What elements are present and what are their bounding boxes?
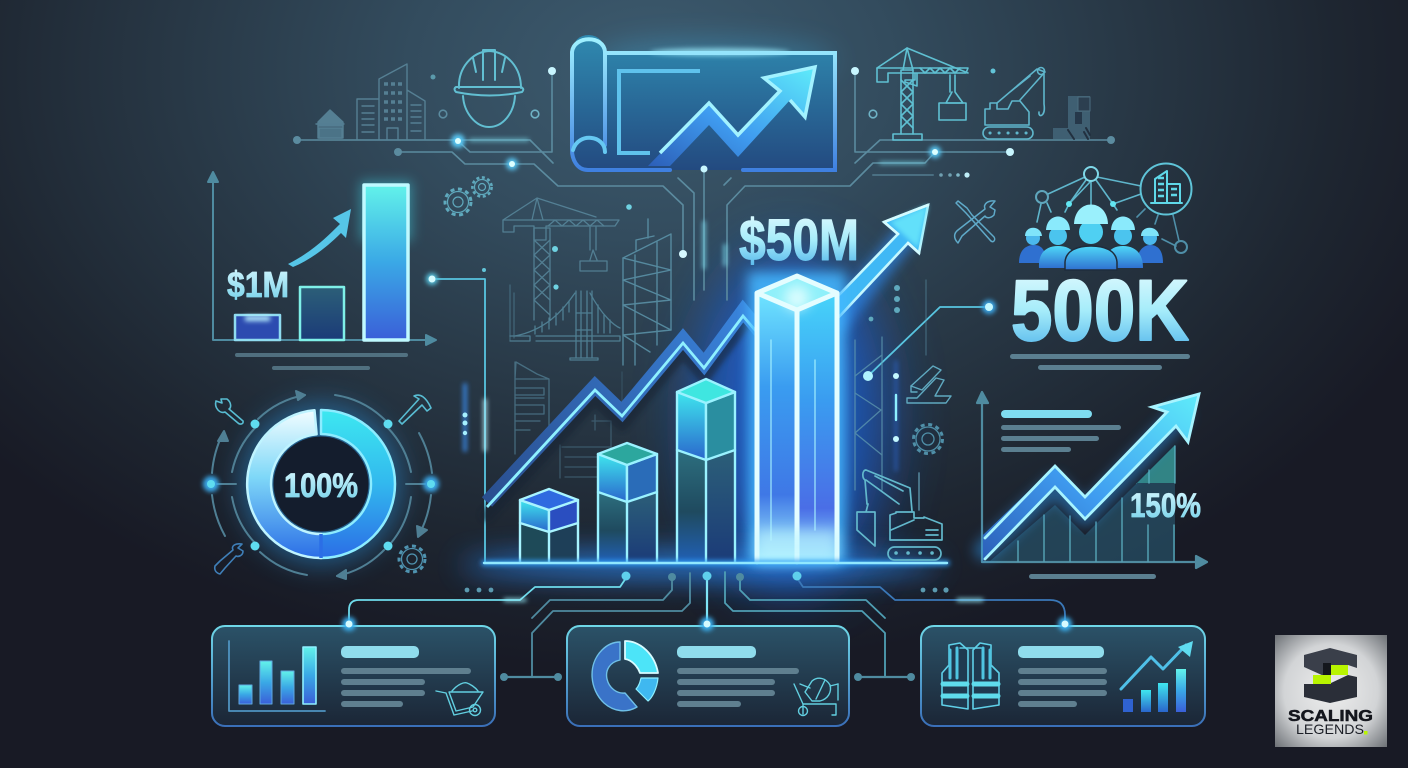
bar: small cube — [520, 489, 578, 562]
worker far right — [1137, 228, 1163, 263]
top right circuit lines — [700, 67, 1115, 300]
bar small — [235, 315, 280, 340]
panel: bar chart summary — [212, 617, 495, 726]
connector to 500K — [863, 300, 996, 381]
icon: background skyscraper scaffold — [623, 219, 671, 365]
text lines — [1001, 410, 1121, 452]
bar: tall cube — [677, 379, 735, 562]
logo: Scaling Legends: LEGENDS — [1296, 721, 1364, 737]
panel: safety vest summary — [921, 617, 1205, 726]
value label: $1M — [227, 264, 289, 305]
gauge glow — [241, 404, 401, 564]
rising trend line — [487, 311, 772, 515]
icon: wrench — [216, 399, 243, 424]
logo: Scaling Legends — [1275, 635, 1387, 747]
icon: city buildings — [316, 64, 425, 139]
icon: hammer — [399, 395, 431, 424]
caption lines — [235, 353, 408, 370]
$50M label: $50M — [739, 208, 859, 273]
icon: steel beams — [907, 366, 951, 403]
worker right — [1104, 216, 1143, 268]
$1M bar chart — [208, 172, 436, 370]
text lines — [677, 646, 799, 707]
main glowing arrow — [838, 205, 928, 320]
scaffold tower right — [855, 280, 926, 490]
dots by connector — [869, 285, 900, 321]
worker centre — [1065, 204, 1117, 270]
vertical glow dashes — [893, 362, 899, 470]
area under arrow — [990, 445, 1175, 561]
icon: small gears — [445, 177, 492, 215]
orbit nodes — [203, 420, 439, 550]
icon: crawler crane — [983, 68, 1045, 139]
arrow glow — [985, 415, 1180, 550]
icon: excavator — [857, 470, 942, 560]
caption line — [1029, 574, 1156, 579]
icon: wrench lower — [215, 544, 243, 574]
icon: wheelbarrow — [436, 683, 483, 716]
rising arrow — [983, 394, 1199, 561]
value label: 150% — [1130, 487, 1201, 525]
gauge value: 100% — [284, 467, 358, 505]
icon: background suspension bridge — [510, 285, 620, 360]
logo dot — [1364, 731, 1368, 734]
panel node — [700, 617, 714, 631]
chart axes — [208, 172, 436, 345]
icon: hard hat worker — [454, 50, 523, 127]
axes — [977, 392, 1207, 568]
growth arrow — [288, 209, 351, 267]
mini growth chart — [1121, 641, 1193, 712]
bar tall — [364, 185, 408, 340]
dots near sketch — [552, 204, 632, 290]
gauge ring — [247, 410, 395, 558]
text lines — [341, 646, 471, 707]
icon: background buildings — [515, 362, 622, 478]
mini donut — [592, 641, 658, 711]
150% growth chart — [977, 392, 1207, 579]
icon: gear right — [914, 424, 942, 454]
500K label: 500K — [1011, 263, 1189, 359]
worker left — [1039, 216, 1078, 268]
chart baseline — [484, 560, 947, 566]
100% donut gauge — [203, 391, 439, 579]
icon: safety vest — [942, 643, 999, 709]
text lines — [1018, 646, 1107, 707]
network — [1036, 164, 1192, 253]
top left circuit lines — [293, 67, 694, 300]
logo mark — [1304, 648, 1357, 703]
network and workers icon — [1019, 164, 1192, 270]
icon: stacked boxes — [1053, 96, 1090, 139]
icon: background crane sketch — [503, 198, 619, 320]
bar medium — [300, 287, 344, 340]
panel node — [342, 617, 356, 631]
icon: cement mixer — [794, 678, 838, 716]
logo wordmark: SCALING — [1288, 708, 1373, 725]
icon: wrench and screwdriver — [955, 201, 995, 243]
icon: blueprint — [572, 35, 835, 170]
panel node — [1058, 617, 1072, 631]
mini bar chart — [229, 641, 325, 711]
icon: gear — [399, 546, 425, 572]
glow: central blue aura — [460, 40, 940, 590]
icon: tower crane — [877, 48, 968, 140]
panel: donut summary — [567, 617, 849, 726]
orbit arcs — [212, 391, 432, 579]
hero glowing bar — [748, 272, 846, 564]
worker far left — [1019, 228, 1046, 263]
500K caption lines — [1010, 354, 1190, 370]
bar: medium cube — [598, 443, 657, 562]
left vertical connector and top callout — [426, 268, 486, 563]
glow behind tallest bar — [360, 181, 412, 241]
bottom connectors — [349, 572, 1065, 681]
